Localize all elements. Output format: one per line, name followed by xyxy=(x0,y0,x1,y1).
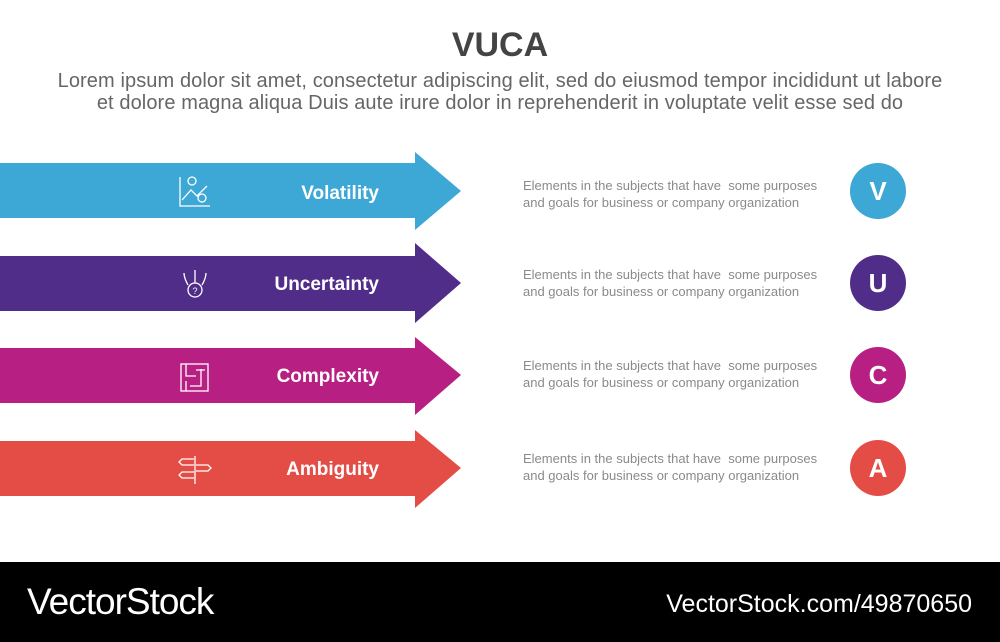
footer bar: VectorStock.com/49870650 xyxy=(666,590,972,618)
text: Elements in the subjects that have some purposes xyxy=(523,267,817,282)
arrow: uncertainty xyxy=(0,243,461,323)
arrow: complexity: Complexity xyxy=(277,366,379,387)
arrow: complexity xyxy=(0,337,461,415)
arrow: ambiguity: Ambiguity xyxy=(286,459,379,480)
descriptions: Elements in the subjects that have some purposes xyxy=(523,178,817,193)
letter circles: V xyxy=(869,176,887,206)
subtitle: Lorem ipsum dolor sit amet, consectetur adipiscing elit, sed do eiusmod tempor incididunt ut labore xyxy=(58,70,942,92)
arrow: volatility: Volatility xyxy=(301,183,379,204)
text: A xyxy=(869,453,887,483)
text: Elements in the subjects that have some purposes xyxy=(523,358,817,373)
arrow: ambiguity xyxy=(0,430,461,508)
arrow: uncertainty: ? xyxy=(192,286,198,296)
footer bar: VectorStock xyxy=(27,581,213,622)
letter circles xyxy=(850,163,906,219)
descriptions xyxy=(523,178,817,210)
title: VUCA xyxy=(452,26,548,64)
text: Elements in the subjects that have some purposes xyxy=(523,451,817,466)
descriptions: and goals for business or company organization xyxy=(523,195,799,210)
text: and goals for business or company organization xyxy=(523,468,799,483)
arrow: volatility xyxy=(0,152,461,230)
arrow: uncertainty: Uncertainty xyxy=(274,274,379,295)
subtitle: et dolore magna aliqua Duis aute irure dolor in reprehenderit in voluptate velit esse sed do xyxy=(97,92,903,114)
subtitle xyxy=(58,70,942,114)
text: C xyxy=(869,360,887,390)
text: and goals for business or company organization xyxy=(523,284,799,299)
footer bar xyxy=(0,562,1000,642)
text: and goals for business or company organization xyxy=(523,375,799,390)
text: U xyxy=(869,268,887,298)
